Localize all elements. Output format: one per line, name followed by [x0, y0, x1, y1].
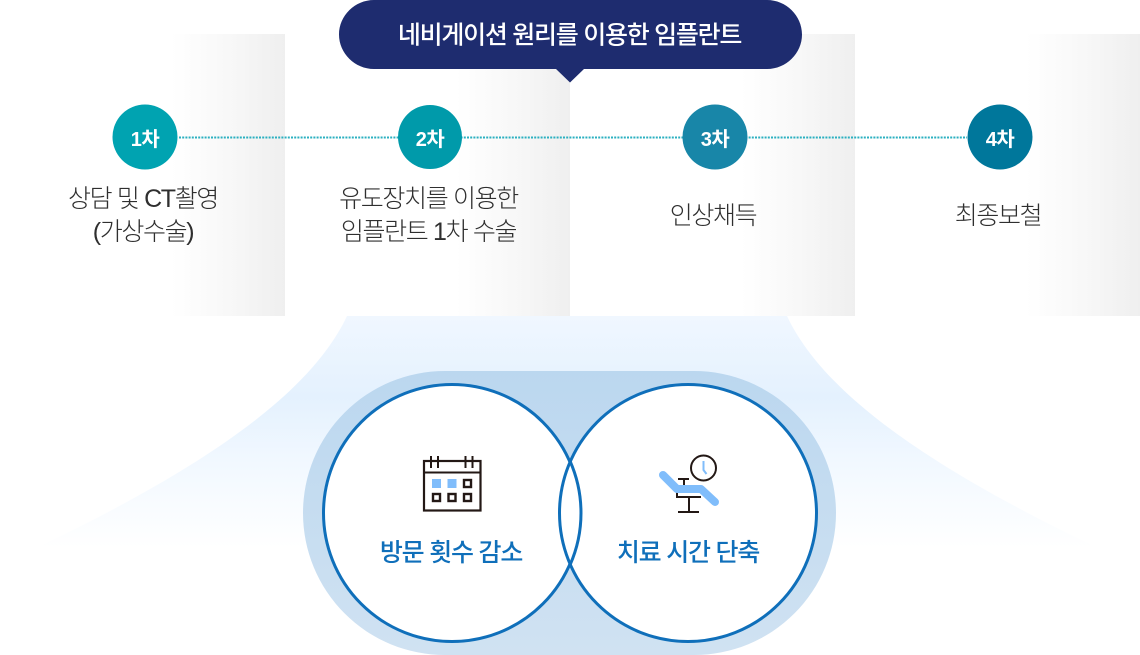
circle: shorter treatment — [560, 384, 816, 642]
step 3: 3차 — [701, 128, 729, 151]
step 3: 인상채득 — [670, 202, 757, 230]
label: shorter treatment: 치료 시간 단축 — [617, 539, 759, 567]
step 2: 2차 — [416, 128, 444, 151]
venn backdrop — [303, 371, 836, 655]
icon: dental chair with clock — [663, 456, 716, 512]
connecting dotted line — [179, 136, 967, 138]
title banner — [339, 0, 802, 82]
panel backgrounds — [0, 34, 1140, 316]
step 1 — [68, 104, 218, 246]
left circle arc inside overlap — [570, 461, 581, 565]
label: fewer visits: 방문 횟수 감소 — [380, 539, 522, 567]
step 1: 상담 및 CT촬영 — [68, 185, 218, 213]
step 2 — [339, 105, 519, 246]
step 3 — [670, 104, 757, 230]
step 1: (가상수술) — [93, 218, 193, 246]
icon: calendar — [424, 456, 480, 510]
step 4 — [955, 104, 1041, 230]
step 1: 1차 — [131, 128, 159, 151]
step 2: 임플란트 1차 수술 — [341, 218, 516, 246]
step 4: 최종보철 — [955, 202, 1041, 230]
step 2: 유도장치를 이용한 — [339, 185, 519, 213]
funnel background — [36, 316, 1098, 548]
circle: fewer visits — [324, 384, 580, 642]
title banner: 네비게이션 원리를 이용한 임플란트 — [398, 22, 741, 50]
step 4: 4차 — [986, 128, 1014, 151]
